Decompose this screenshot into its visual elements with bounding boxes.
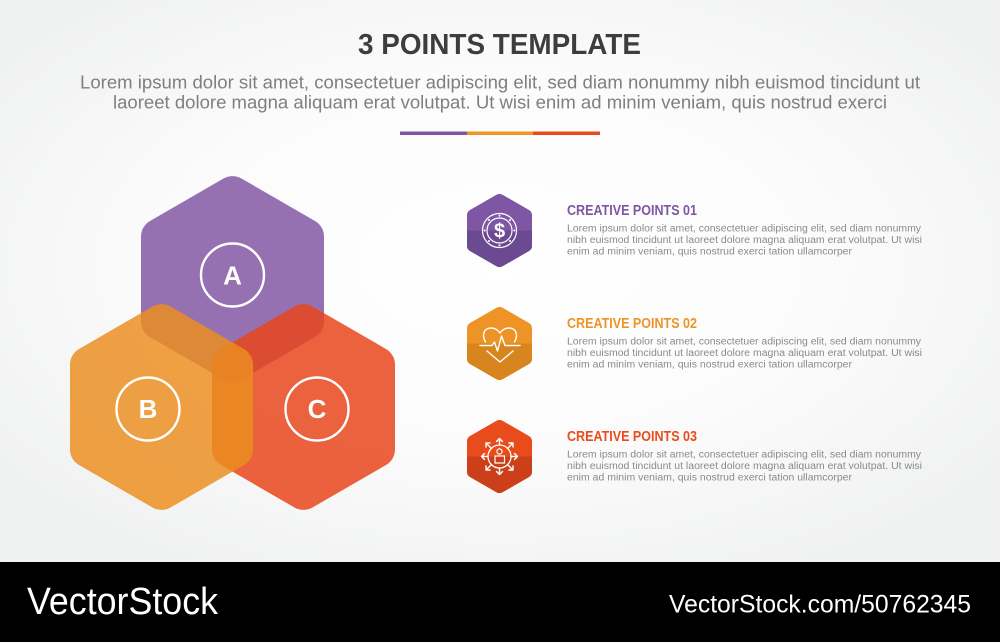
overlapping hexagon diagram <box>88 194 377 492</box>
body 01: Lorem ipsum dolor sit amet, consectetuer adipiscing elit, sed diam nonummy <box>567 224 921 234</box>
icon: dollar coin on purple hexagon <box>473 200 526 261</box>
badge A: A <box>223 260 242 290</box>
body 02 <box>567 336 922 370</box>
icon: dollar coin on purple hexagon: $ <box>494 220 505 242</box>
subtitle text: Lorem ipsum dolor sit amet, consectetuer adipiscing elit, sed diam nonummy nibh euismod tincidunt ut <box>80 72 920 92</box>
body 01: nibh euismod tincidunt ut laoreet dolore magna aliquam erat volutpat. Ut wisi <box>567 235 922 246</box>
heading 02: CREATIVE POINTS 02 <box>567 316 697 332</box>
badge C: C <box>308 394 327 424</box>
badge B: B <box>139 394 157 424</box>
subtitle text: laoreet dolore magna aliquam erat volutpat. Ut wisi enim ad minim veniam, quis nostrud exerci <box>113 92 887 112</box>
body 02: nibh euismod tincidunt ut laoreet dolore magna aliquam erat volutpat. Ut wisi <box>567 348 922 359</box>
body 03: nibh euismod tincidunt ut laoreet dolore magna aliquam erat volutpat. Ut wisi <box>567 461 922 472</box>
tri-colour divider <box>400 132 600 135</box>
body 01 <box>567 224 922 258</box>
body 03: enim ad minim veniam, quis nostrud exerci tation ullamcorper <box>567 472 853 484</box>
badge C <box>286 378 348 440</box>
body 03: Lorem ipsum dolor sit amet, consectetuer adipiscing elit, sed diam nonummy <box>567 450 921 460</box>
badge A <box>201 244 264 306</box>
point 01 <box>473 200 922 261</box>
badge B <box>116 378 180 440</box>
body 02: enim ad minim veniam, quis nostrud exerci tation ullamcorper <box>567 360 853 370</box>
heading 01: CREATIVE POINTS 01 <box>567 203 697 219</box>
title: 3 POINTS TEMPLATE <box>358 29 641 61</box>
body 01: enim ad minim veniam, quis nostrud exerci tation ullamcorper <box>567 246 853 258</box>
subtitle text <box>80 72 920 112</box>
icon: person with outward arrows on red hexagon <box>473 426 526 487</box>
body 03 <box>567 450 922 484</box>
point 03 <box>473 426 922 487</box>
footer logo text: VectorStock <box>27 581 219 623</box>
footer image id: VectorStock.com/50762345 <box>669 590 971 618</box>
hexagon B <box>88 322 235 492</box>
point 02 <box>473 313 922 374</box>
footer bar <box>0 562 1000 642</box>
hexagon C <box>230 322 377 492</box>
icon: heartbeat on orange hexagon <box>473 313 526 374</box>
hexagon A <box>159 194 306 364</box>
body 02: Lorem ipsum dolor sit amet, consectetuer adipiscing elit, sed diam nonummy <box>567 336 921 348</box>
heading 03: CREATIVE POINTS 03 <box>567 429 697 445</box>
